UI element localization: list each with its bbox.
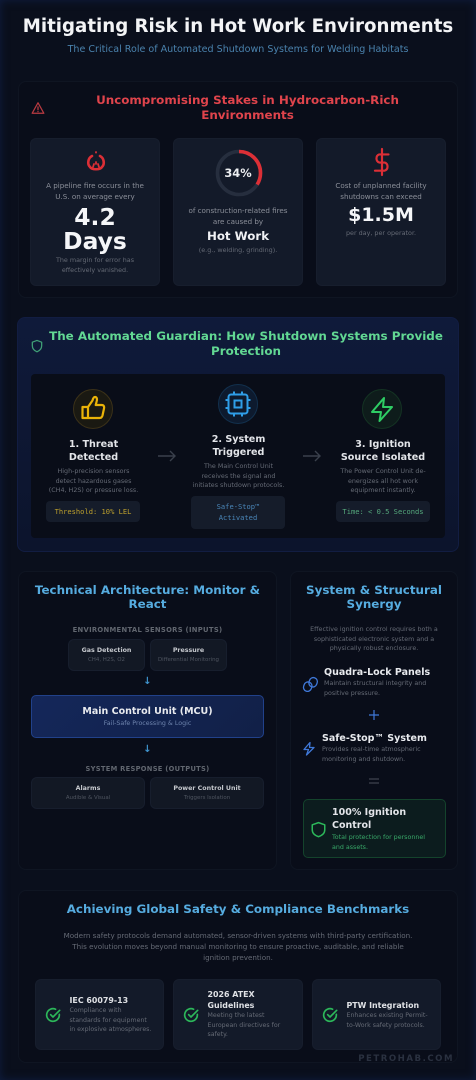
item text — [324, 667, 430, 697]
heading: automated guardian — [49, 329, 443, 358]
card: 2026 ATEX guidelines — [173, 979, 303, 1050]
subtitle: The Critical Role of Automated Shutdown Systems for Welding Habitats — [68, 44, 408, 55]
panel: system and structural synergy — [290, 571, 458, 870]
heading: synergy: Synergy — [346, 597, 401, 611]
intro text — [310, 626, 438, 652]
icon: thumbs up — [73, 389, 113, 429]
card text: IEC 60079-13 — [70, 996, 128, 1005]
card text — [70, 995, 151, 1035]
card: power control unit — [150, 777, 264, 809]
panel: compliance benchmarks — [18, 890, 458, 1063]
item text: Maintain structural integrity and — [324, 680, 426, 687]
icon: processor chip — [218, 384, 258, 424]
step text: energizes all hot work — [348, 477, 418, 485]
intro text: physically robust enclosure. — [330, 645, 418, 652]
heading: automated guardian: Protection — [211, 344, 281, 358]
intro text: Effective ignition control requires both a — [310, 626, 438, 633]
note: examples: (e.g., welding, grinding). — [199, 246, 277, 254]
card text — [346, 1000, 428, 1030]
text: shutdown cost — [335, 181, 427, 201]
step text: The Main Control Unit — [204, 462, 273, 470]
step 3: ignition source isolated — [336, 389, 430, 522]
icon: shield — [311, 821, 326, 838]
step 1: threat detected — [46, 389, 140, 522]
item: quadra-lock panels — [302, 667, 430, 697]
note: margin: The margin for error has — [56, 256, 134, 264]
card text: Triggers Isolation — [184, 795, 230, 801]
card: PTW integration — [312, 979, 441, 1050]
step title: 2. System — [212, 434, 265, 445]
icon: warning triangle — [32, 102, 44, 114]
item text: Provides real-time atmospheric — [322, 746, 421, 753]
icon: check circle — [322, 1007, 338, 1023]
card text: Alarms — [76, 785, 100, 792]
card text — [82, 647, 131, 663]
card: gas detection — [68, 639, 145, 671]
step text: equipment instantly. — [350, 486, 416, 494]
arrow: step 1 to 2 — [158, 450, 176, 462]
badge: safe-stop: Activated — [219, 513, 257, 522]
badge: threshold: Threshold: 10% LEL — [55, 507, 131, 516]
icon: dollar sign — [374, 148, 390, 176]
step text — [49, 467, 138, 494]
icon: lightning bolt — [362, 389, 402, 429]
item: safe-stop system — [303, 733, 427, 763]
card text — [208, 989, 280, 1040]
heading: stakes: Environments — [201, 108, 294, 122]
step text: High-precision sensors — [57, 467, 130, 475]
step title: 1. Threat — [69, 439, 118, 450]
card text: Power Control Unit — [173, 785, 241, 792]
badge: time — [336, 501, 430, 522]
card text: Differential Monitoring — [158, 657, 219, 663]
step title — [212, 434, 265, 458]
heading: synergy: System & Structural — [306, 582, 442, 596]
stat: 4.2 days: 4.2 — [74, 203, 116, 231]
step title: 3. Ignition — [355, 439, 411, 450]
card: shutdown cost — [316, 138, 446, 286]
intro text: Modern safety protocols demand automated, sensor-driven systems with third-party certification. — [64, 931, 412, 940]
label: outputs: SYSTEM RESPONSE (OUTPUTS) — [85, 765, 210, 773]
note: margin — [56, 256, 134, 274]
intro text: sophisticated electronic system and a — [314, 636, 434, 643]
intro text: ignition prevention. — [203, 953, 273, 962]
stat: 4.2 days — [63, 203, 127, 255]
step text: receives the signal and — [202, 472, 275, 480]
text: construction fires — [188, 206, 288, 226]
card text: safety. — [208, 1031, 228, 1038]
arrow: sensors to MCU: ↓ — [143, 676, 152, 687]
stat: 1.5M: $1.5M — [348, 204, 414, 226]
card: IEC 60079-13 — [35, 979, 164, 1050]
card text: Meeting the latest — [208, 1012, 264, 1019]
item text: positive pressure. — [324, 690, 380, 697]
result: 100 percent ignition control — [303, 799, 446, 858]
step title: Source Isolated — [341, 452, 425, 463]
step text: initiates shutdown protocols. — [193, 481, 284, 489]
result text — [332, 807, 425, 852]
chart: 34 percent donut — [216, 150, 262, 196]
intro text: This evolution moves beyond manual monitoring to ensure proactive, auditable, and reliable — [72, 942, 404, 951]
icon: flame — [86, 151, 106, 170]
card text: Guidelines — [208, 1001, 254, 1010]
badge: time: Time: < 0.5 Seconds — [342, 507, 424, 516]
step title — [69, 439, 118, 463]
text: shutdown cost: Cost of unplanned facility — [335, 181, 427, 190]
panel: technical architecture — [18, 571, 277, 870]
text: pipeline fire: A pipeline fire occurs in the — [46, 181, 144, 190]
symbol: equals — [291, 777, 457, 785]
panel: stakes — [18, 81, 458, 298]
card text: in explosive atmospheres. — [70, 1026, 151, 1033]
note: margin: effectively vanished. — [62, 266, 128, 274]
badge: safe-stop — [191, 496, 285, 529]
text: construction fires: of construction-related fires — [188, 206, 288, 214]
item text: Safe-Stop™ System — [322, 733, 427, 744]
heading: technical architecture — [34, 582, 260, 611]
step 2: system triggered — [191, 384, 285, 529]
panel: automated guardian — [17, 317, 459, 552]
card text: standards for equipment — [70, 1017, 147, 1024]
icon: chain links — [302, 676, 318, 692]
text: shutdown cost: shutdowns can exceed — [340, 192, 422, 201]
text: construction fires: are caused by — [213, 217, 263, 226]
card text: Gas Detection — [82, 647, 131, 654]
text: pipeline fire: U.S. on average every — [55, 192, 135, 201]
step text: (CH4, H2S) or pressure loss. — [49, 486, 138, 494]
stat: 34 percent: 34% — [224, 166, 252, 180]
card text: European directives for — [208, 1022, 280, 1029]
heading: stakes: Uncompromising Stakes in Hydrocarbon-Rich — [96, 93, 399, 107]
card text: Compliance with — [70, 1007, 122, 1014]
card: pipeline fire — [30, 138, 160, 286]
heading: compliance: Achieving Global Safety & Compliance Benchmarks — [67, 902, 409, 916]
result text: 100% Ignition — [332, 807, 406, 818]
intro text — [19, 930, 457, 964]
step text: The Power Control Unit de- — [340, 467, 426, 475]
MCU text: Main Control Unit (MCU) — [82, 706, 213, 717]
step text — [340, 467, 426, 494]
step title: Triggered — [213, 447, 264, 458]
card text: Enhances existing Permit- — [346, 1012, 428, 1019]
result text: and assets. — [332, 844, 368, 851]
result text: Total protection for personnel — [332, 834, 425, 841]
card: hot work — [173, 138, 303, 286]
stat: 4.2 days: Days — [63, 227, 127, 255]
heading: stakes — [96, 93, 399, 122]
note: per day: per day, per operator. — [346, 229, 416, 237]
arrow: step 2 to 3 — [303, 450, 321, 462]
arrow: MCU to outputs: ↓ — [143, 744, 152, 755]
heading: technical architecture: Technical Architecture: Monitor & — [35, 582, 260, 596]
card text: CH4, H2S, O2 — [88, 657, 125, 663]
card text: to-Work safety protocols. — [346, 1022, 425, 1029]
card: alarms — [31, 777, 145, 809]
card text: PTW Integration — [346, 1001, 419, 1010]
card text — [66, 785, 110, 801]
step text — [193, 462, 284, 489]
step title — [341, 439, 425, 463]
card text: Pressure — [173, 647, 204, 654]
result text: Control — [332, 820, 371, 830]
icon: check circle — [183, 1007, 199, 1023]
icon: check circle — [45, 1007, 61, 1023]
badge: threshold — [46, 501, 140, 522]
card text — [173, 785, 241, 801]
text: pipeline fire — [46, 181, 144, 201]
card text: Audible & Visual — [66, 795, 110, 801]
icon: shield — [32, 340, 42, 352]
card: pressure — [150, 639, 227, 671]
step text: detect hazardous gases — [56, 477, 131, 485]
item text: Quadra-Lock Panels — [324, 667, 430, 678]
MCU text — [82, 706, 213, 727]
watermark: PETROHAB.COM — [358, 1054, 454, 1064]
icon: bolt — [303, 742, 315, 756]
item text — [322, 733, 427, 764]
card text: 2026 ATEX — [208, 990, 255, 999]
flow: three steps — [31, 374, 445, 538]
title: Mitigating Risk in Hot Work Environments — [23, 16, 453, 37]
label: inputs: ENVIRONMENTAL SENSORS (INPUTS) — [73, 626, 222, 634]
heading: automated guardian: The Automated Guardian: How Shutdown Systems Provide — [49, 329, 443, 343]
step title: Detected — [69, 452, 118, 463]
stat: hot work: Hot Work — [207, 229, 269, 243]
badge: safe-stop: Safe-Stop™ — [217, 502, 259, 511]
heading: technical architecture: React — [128, 597, 166, 611]
MCU text: Fail-Safe Processing & Logic — [104, 720, 191, 727]
card text — [158, 647, 219, 663]
item text: monitoring and shutdown. — [322, 756, 405, 763]
symbol: plus — [369, 710, 379, 720]
box: main control unit — [31, 695, 264, 738]
heading: synergy — [306, 582, 442, 611]
